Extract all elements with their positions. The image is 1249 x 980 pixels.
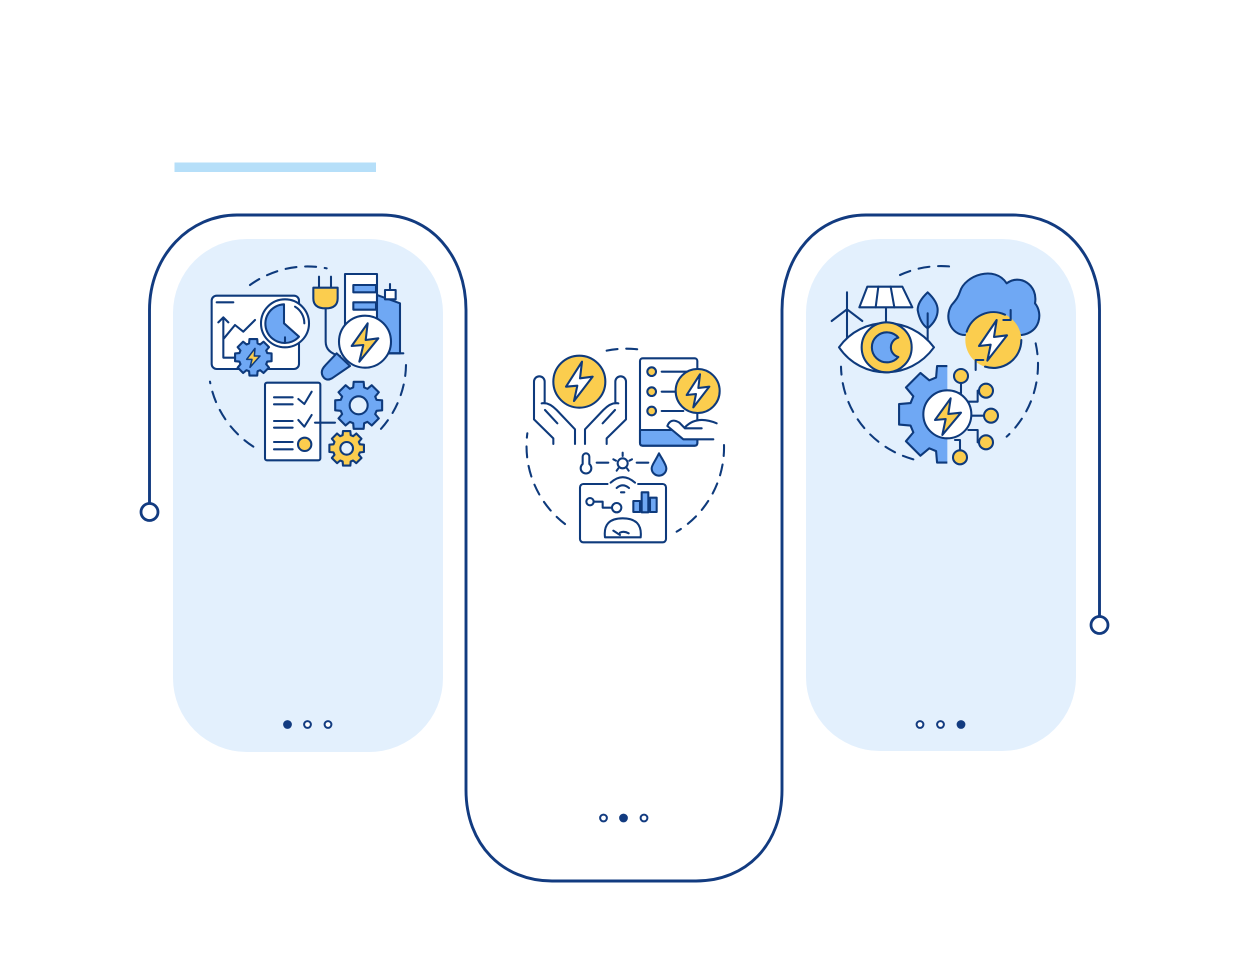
plug [313, 277, 340, 356]
large blue gear [335, 382, 382, 429]
pagination dots: right [917, 721, 964, 728]
gear with bolt [235, 339, 272, 376]
phone list [640, 358, 697, 446]
receiving hand outline [667, 420, 717, 439]
panel: right card background [806, 239, 1076, 751]
thermometer [581, 453, 591, 473]
pagination dots: center [600, 815, 647, 821]
left end node [141, 504, 158, 520]
icon: energy audit and monitoring [210, 266, 406, 466]
clock [261, 299, 309, 347]
leaf [918, 292, 938, 340]
receiving hand [667, 420, 717, 439]
dashed ring [841, 266, 1038, 459]
wind turbine [832, 292, 862, 340]
header bar placeholder [174, 162, 376, 172]
caring hands [534, 376, 626, 444]
coin over phone [676, 369, 720, 413]
cloud [948, 274, 1039, 335]
serpentine connecting frame [141, 215, 1108, 881]
smart device [580, 477, 666, 542]
solar panel [859, 287, 912, 323]
pagination dots: left [284, 721, 331, 728]
small yellow gear [329, 431, 364, 466]
checklist [265, 383, 335, 460]
magnifier with bolt [322, 316, 391, 380]
dashed ring [527, 349, 724, 532]
water drop [652, 453, 666, 476]
building [345, 274, 403, 353]
bolt coin [553, 356, 605, 408]
chart panel [212, 296, 299, 369]
power coin [965, 310, 1021, 370]
circuit nodes [953, 369, 998, 464]
eye [839, 322, 934, 372]
icon: renewable vision and smart power [832, 266, 1039, 464]
panel: left card background [173, 239, 443, 752]
half gear [898, 365, 948, 464]
icon: energy saving and smart sensors [527, 349, 724, 542]
connector lines and sun [597, 453, 648, 471]
central bolt [923, 390, 971, 438]
right end node [1091, 616, 1108, 634]
dashed ring [210, 266, 406, 447]
